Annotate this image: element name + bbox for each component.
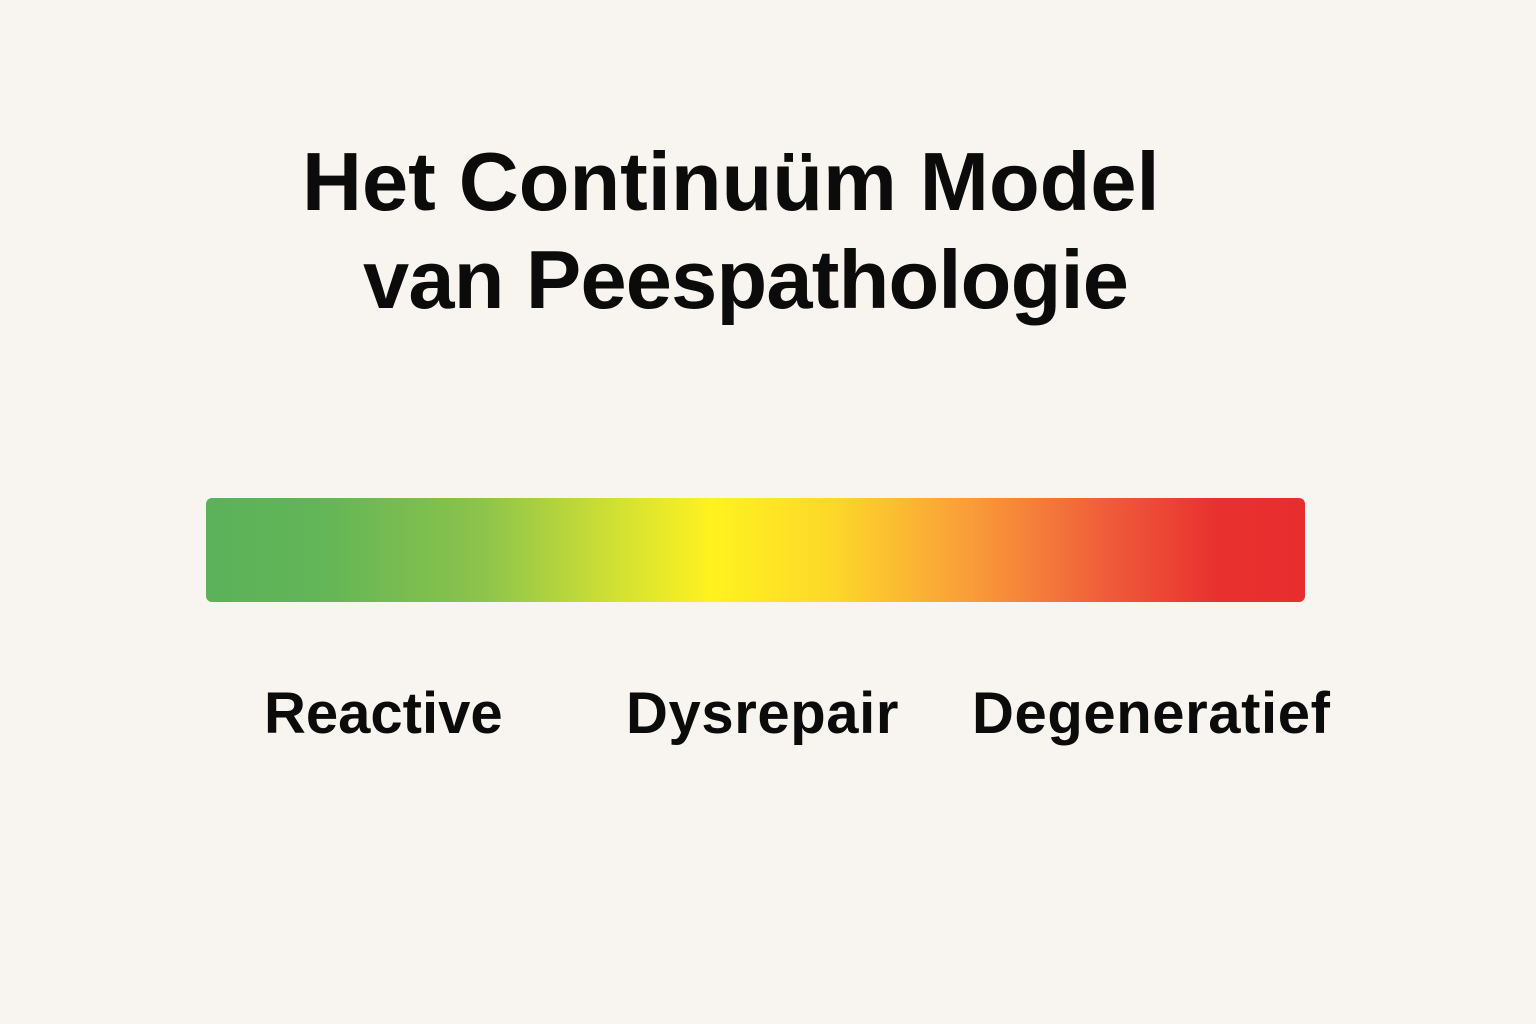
label: Dysrepair: Dysrepair: [626, 681, 899, 746]
label: Degeneratief: Degeneratief: [972, 681, 1331, 746]
gradient bar: tendon pathology continuum: [206, 498, 1305, 602]
title: van Peespathologie: [363, 233, 1128, 326]
label: Reactive: Reactive: [264, 681, 503, 746]
title: [302, 135, 1160, 326]
title: Het Continuüm Model: [302, 135, 1160, 228]
